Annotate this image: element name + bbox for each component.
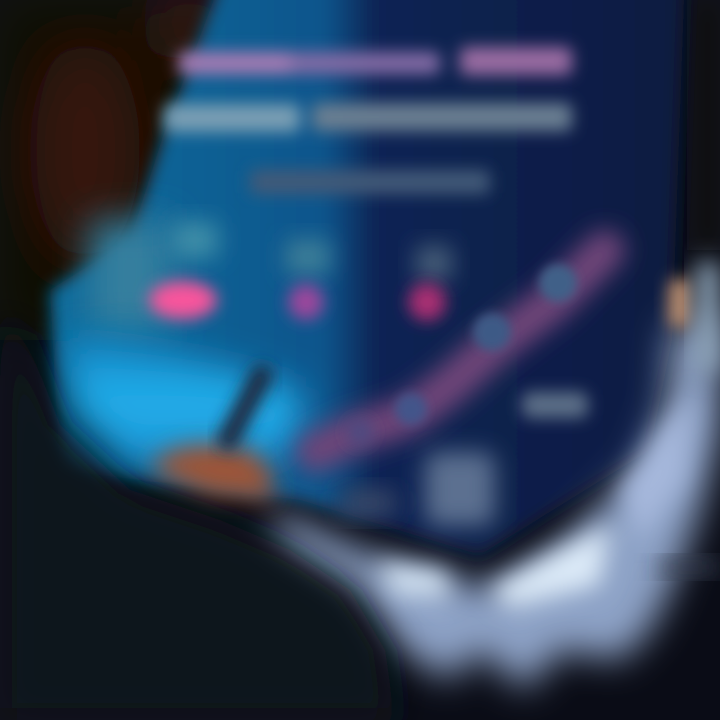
magenta dot marker 2 xyxy=(288,284,324,320)
chart point 3 xyxy=(473,313,511,351)
right edge background xyxy=(695,0,720,250)
bright cyan screen area xyxy=(65,340,300,465)
light blue left column xyxy=(90,220,170,330)
chart line xyxy=(315,250,605,452)
finger, orange xyxy=(668,278,692,328)
right hand, light grey xyxy=(696,262,720,372)
heading line 1 xyxy=(178,47,572,75)
pink pill marker xyxy=(149,281,217,319)
chart point 1 xyxy=(348,420,372,444)
subtitle xyxy=(250,170,490,194)
column label 1 xyxy=(172,222,218,258)
person's shoulder silhouette xyxy=(0,320,395,720)
column label 3 xyxy=(416,246,452,280)
stylus xyxy=(228,375,262,440)
right side grey band xyxy=(660,560,720,574)
chart point 4 xyxy=(539,264,577,302)
heading line 2 xyxy=(164,103,572,132)
sleeve highlights xyxy=(375,390,695,608)
tablet screen panel xyxy=(50,0,685,555)
column label 2 xyxy=(286,240,330,274)
white sleeve xyxy=(270,310,720,690)
lower left label xyxy=(340,490,396,516)
chart point 2 xyxy=(395,393,427,425)
person's head silhouette xyxy=(0,0,240,340)
right text block xyxy=(522,392,588,418)
hand holding the stylus xyxy=(150,444,275,500)
rising line chart xyxy=(315,250,605,452)
magenta dot marker 3 xyxy=(408,283,446,321)
lower icon block xyxy=(425,452,495,526)
